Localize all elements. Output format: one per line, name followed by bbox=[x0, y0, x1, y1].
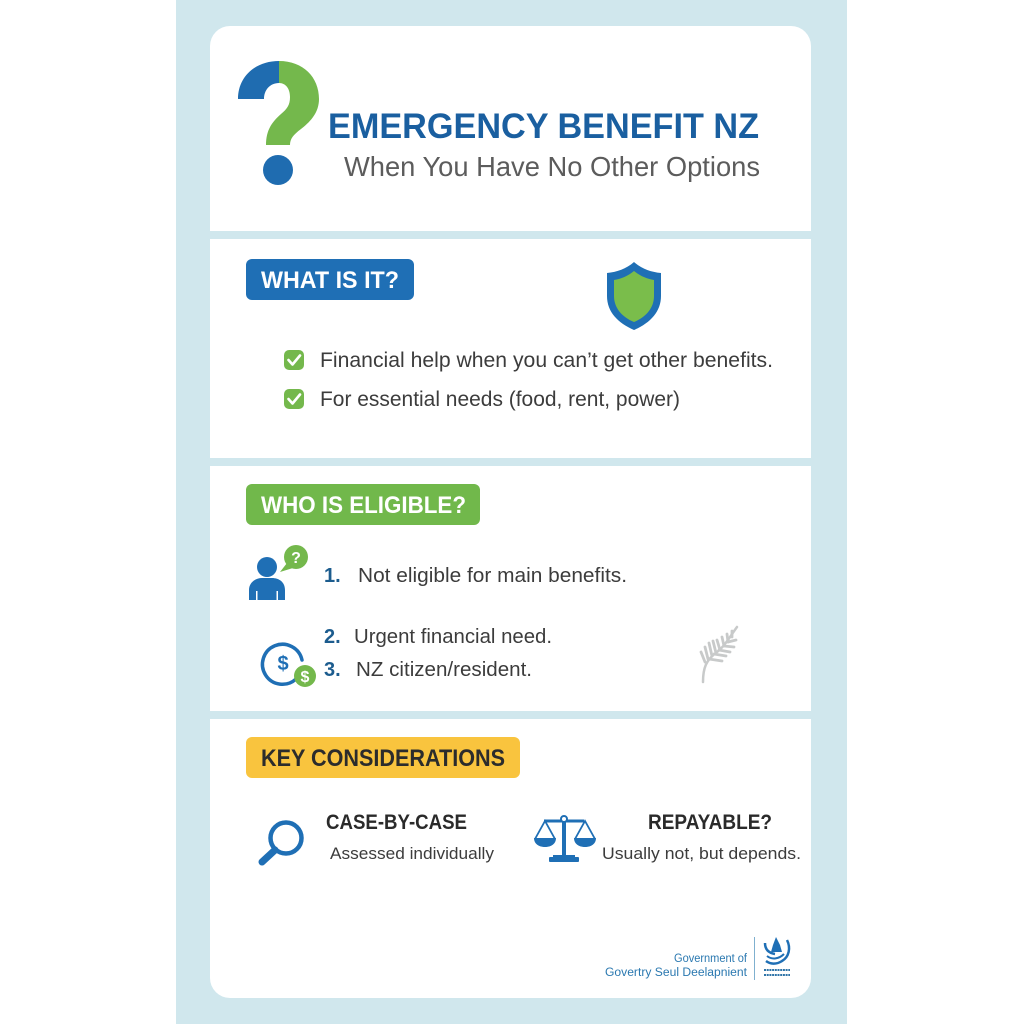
heading: what is it bbox=[246, 259, 414, 300]
government logo footer: Government of bbox=[674, 953, 748, 965]
icon: dollar coin bbox=[262, 644, 316, 687]
eligibility item 3: 3. bbox=[324, 659, 341, 681]
title: EMERGENCY BENEFIT NZ bbox=[328, 107, 759, 146]
panel: header bbox=[238, 61, 760, 185]
panel: what is it bbox=[246, 259, 773, 411]
heading: key considerations: KEY CONSIDERATIONS bbox=[261, 745, 505, 772]
icon: dollar coin: $ bbox=[301, 669, 310, 686]
bullet: financial help: Financial help when you can’t get other benefits. bbox=[320, 349, 773, 372]
heading: what is it: WHAT IS IT? bbox=[261, 267, 399, 294]
eligibility item 1: 1. bbox=[324, 565, 341, 587]
heading: who is eligible bbox=[246, 484, 480, 525]
case-by-case text bbox=[326, 811, 494, 863]
heading: key considerations bbox=[246, 737, 520, 778]
case-by-case text: CASE-BY-CASE bbox=[326, 811, 467, 834]
panel: who is eligible bbox=[246, 484, 737, 687]
repayable text: REPAYABLE? bbox=[648, 811, 772, 834]
icon: balance scales bbox=[534, 816, 596, 862]
icon: silver fern bbox=[701, 627, 737, 682]
government logo footer bbox=[605, 937, 790, 980]
heading: who is eligible: WHO IS ELIGIBLE? bbox=[261, 492, 466, 519]
eligibility item 1: Not eligible for main benefits. bbox=[358, 565, 627, 587]
eligibility item 2: 2. bbox=[324, 626, 341, 648]
icon: person with question bubble: ? bbox=[291, 550, 301, 567]
icon: shield bbox=[607, 262, 661, 330]
government logo footer: Govertry Seul Deelapnient bbox=[605, 967, 748, 979]
panel: key considerations bbox=[246, 737, 801, 863]
icon: person with question bubble bbox=[249, 545, 308, 600]
bullet: essential needs: For essential needs (food, rent, power) bbox=[320, 388, 680, 411]
repayable text: Usually not, but depends. bbox=[602, 844, 801, 863]
icon: government emblem bbox=[764, 937, 790, 975]
eligibility item 3: NZ citizen/resident. bbox=[356, 659, 532, 681]
repayable text bbox=[602, 811, 801, 863]
icon: magnifying glass bbox=[262, 822, 302, 862]
case-by-case text: Assessed individually bbox=[330, 844, 494, 863]
icon: dollar coin: $ bbox=[277, 653, 289, 675]
subtitle: When You Have No Other Options bbox=[344, 151, 760, 182]
icon: question mark bbox=[238, 61, 319, 185]
eligibility item 2: Urgent financial need. bbox=[354, 626, 552, 648]
